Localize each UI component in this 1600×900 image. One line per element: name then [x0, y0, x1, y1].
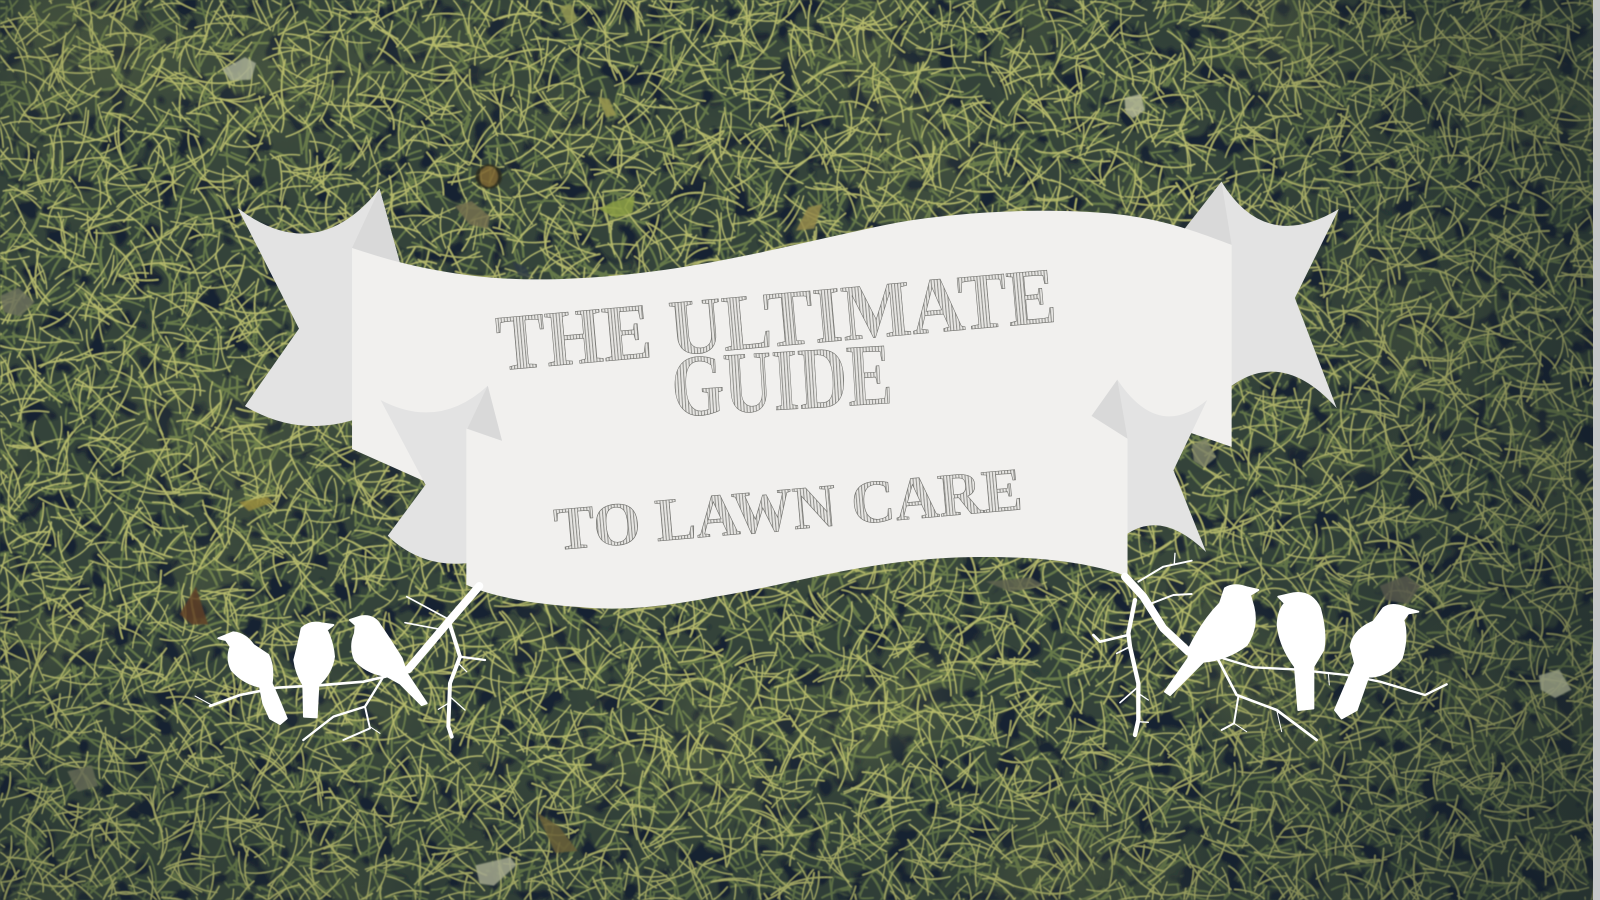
ribbon banner: [238, 182, 1339, 609]
right bird three: [1335, 605, 1418, 718]
front ribbon body: [466, 306, 1128, 609]
right bird one: [1165, 585, 1258, 695]
right branch: [1093, 553, 1447, 740]
left bird three: [350, 616, 427, 705]
title line: GUIDE: GUIDE: [669, 325, 895, 435]
left birds on branch: [195, 586, 485, 740]
right edge strip: [1593, 0, 1600, 900]
left bird one: [218, 632, 287, 724]
title line: THE ULTIMATE: THE ULTIMATE: [493, 252, 1060, 388]
back ribbon left tail: [238, 189, 400, 426]
left branch: [195, 586, 485, 740]
front ribbon left tail: [381, 386, 502, 564]
front ribbon right tail: [1112, 380, 1207, 552]
back ribbon body: [352, 211, 1232, 500]
back ribbon right tail: [1214, 182, 1339, 408]
title text: [493, 252, 1060, 564]
front ribbon right fold: [1090, 380, 1128, 439]
front ribbon left fold: [467, 386, 502, 441]
subtitle line: TO LAWN CARE: TO LAWN CARE: [551, 455, 1025, 564]
back ribbon right fold: [1182, 182, 1232, 245]
left bird two: [294, 623, 334, 717]
right bird two: [1278, 593, 1324, 710]
back ribbon left fold: [352, 189, 400, 263]
right birds on branch: [1093, 553, 1447, 740]
